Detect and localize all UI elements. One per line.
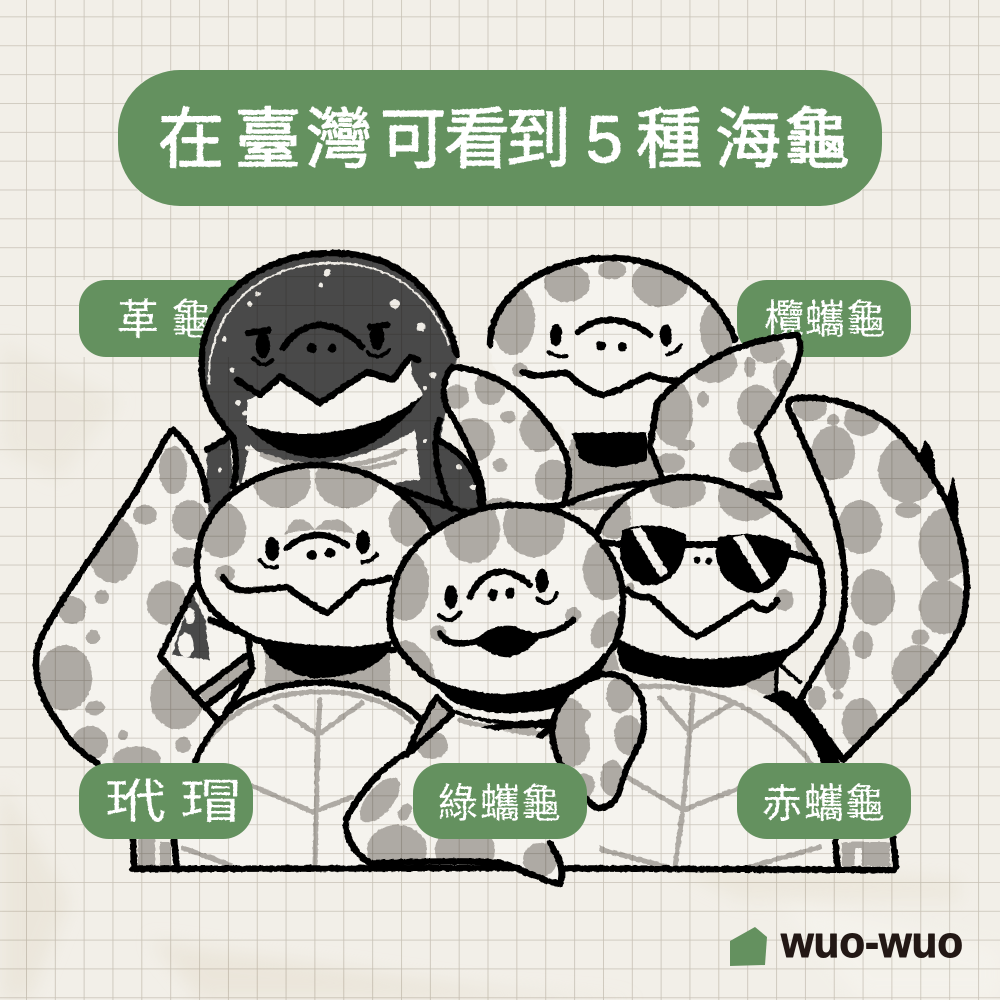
label: 綠蠵龜 <box>413 763 587 839</box>
loggerhead shell <box>560 647 896 870</box>
logo: wuo-wuo wordmark: wuo-wuo <box>780 918 963 967</box>
label: 玳瑁 <box>79 763 253 839</box>
leatherback turtle <box>202 253 480 530</box>
olive ridley right flipper <box>650 335 800 500</box>
green turtle right flipper <box>550 674 644 808</box>
green turtle left flipper <box>346 697 562 884</box>
shell baseline <box>133 868 895 870</box>
title banner <box>118 70 882 206</box>
logo: house icon <box>730 927 767 966</box>
label: 欖蠵龜: 欖蠵龜 <box>764 298 886 342</box>
leatherback rear flipper with pattern <box>160 585 252 723</box>
loggerhead head with sunglasses <box>595 472 825 687</box>
sunglasses <box>600 525 820 593</box>
hawksbill head <box>197 452 440 678</box>
label: 欖蠵龜 <box>737 280 911 357</box>
label: 革龜 <box>79 280 259 357</box>
olive ridley turtle head <box>490 258 740 533</box>
label: 赤蠵龜: 赤蠵龜 <box>762 782 885 826</box>
leatherback jaw <box>247 357 423 434</box>
label: 玳瑁: 玳瑁 <box>105 775 241 828</box>
label: 赤蠵龜 <box>737 763 911 839</box>
label: 革龜: 革龜 <box>117 296 213 343</box>
green turtle shell and neck <box>430 680 600 860</box>
loggerhead raised flipper <box>788 393 975 760</box>
leatherback face <box>256 332 270 358</box>
label: 綠蠵龜: 綠蠵龜 <box>438 782 561 826</box>
hawksbill shell <box>133 650 560 869</box>
olive ridley left flipper <box>444 367 571 522</box>
leatherback white specks <box>324 270 330 276</box>
illustration: five sea turtles <box>36 253 975 884</box>
green turtle head <box>381 493 627 713</box>
title banner: 在臺灣可看到5種海龜 <box>158 102 850 176</box>
hawksbill left flipper <box>36 430 230 780</box>
